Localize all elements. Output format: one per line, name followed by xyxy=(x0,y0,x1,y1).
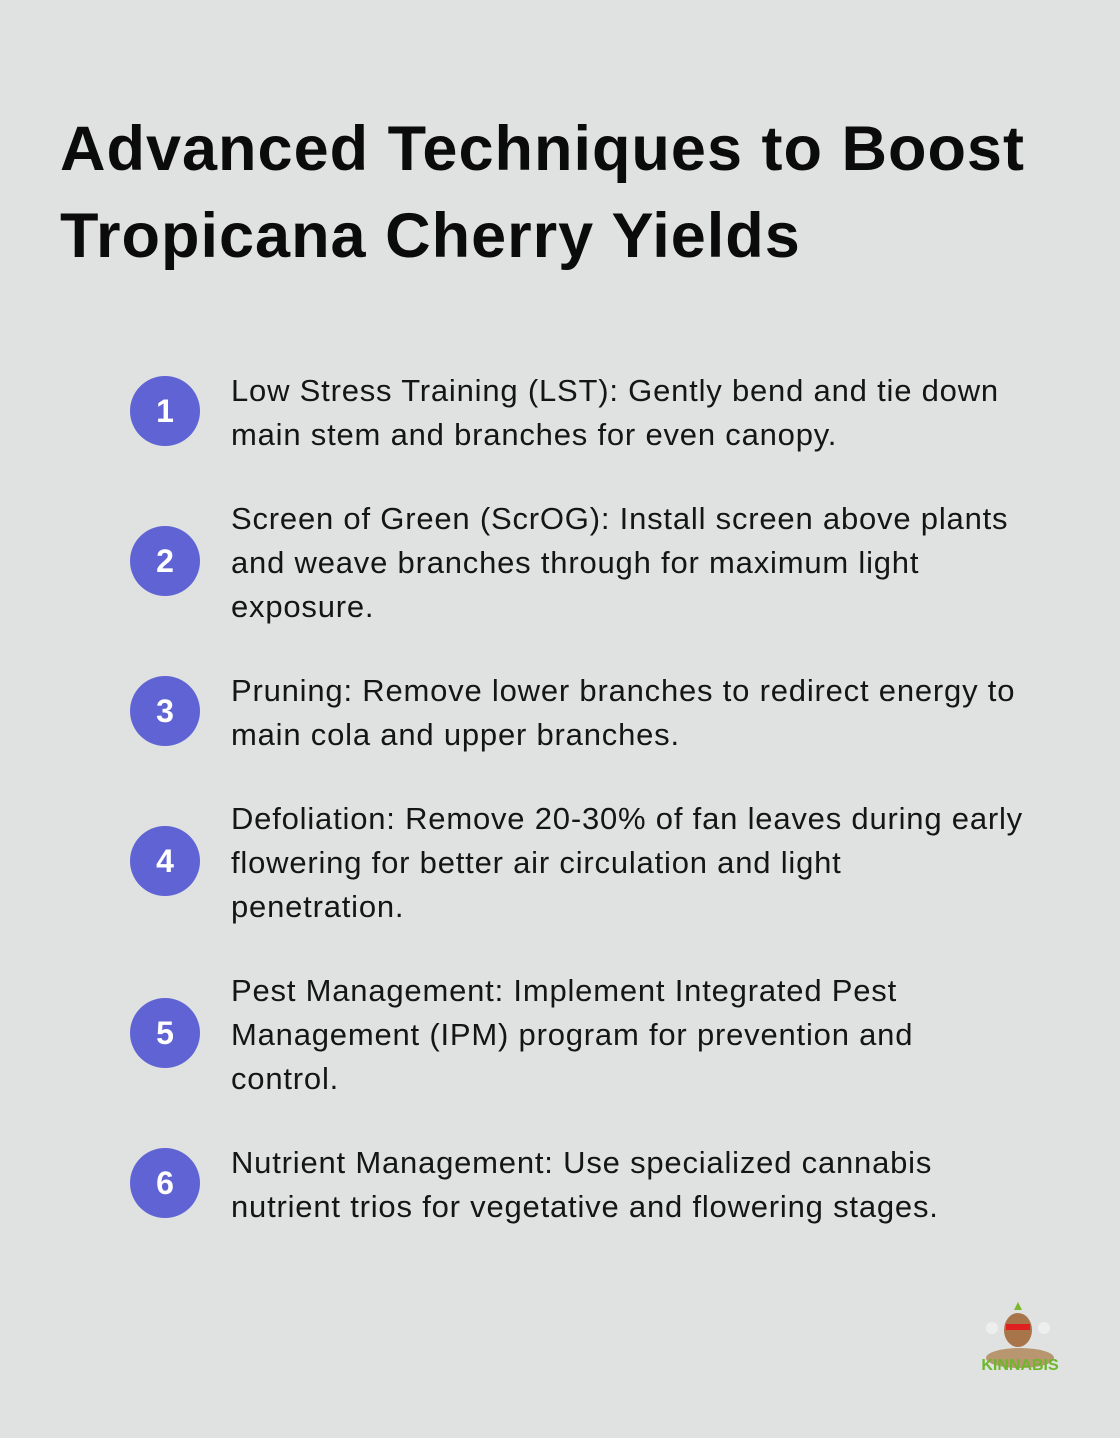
text 1 xyxy=(231,373,999,452)
text 5: control. xyxy=(231,1061,339,1096)
title xyxy=(60,114,1025,271)
badge 1: 1 xyxy=(156,393,174,429)
text 2: and weave branches through for maximum light xyxy=(231,545,919,580)
text 1: main stem and branches for even canopy. xyxy=(231,417,837,452)
logo: KINNABIS xyxy=(981,1357,1059,1374)
text 2: Screen of Green (ScrOG): Install screen above plants xyxy=(231,501,1008,536)
text 6: Nutrient Management: Use specialized cannabis xyxy=(231,1145,932,1180)
text 5 xyxy=(231,973,913,1096)
title: Advanced Techniques to Boost xyxy=(60,114,1025,184)
text 2: exposure. xyxy=(231,589,374,624)
text 4: Defoliation: Remove 20-30% of fan leaves during early xyxy=(231,801,1023,836)
badge 6 xyxy=(130,1148,200,1218)
badge 5: 5 xyxy=(156,1015,174,1051)
text 5: Management (IPM) program for prevention and xyxy=(231,1017,913,1052)
text 4 xyxy=(231,801,1023,924)
item 2 xyxy=(130,501,1008,624)
text 3: main cola and upper branches. xyxy=(231,717,680,752)
item 3 xyxy=(130,673,1015,752)
text 4: penetration. xyxy=(231,889,404,924)
item 5 xyxy=(130,973,913,1096)
badge 5 xyxy=(130,998,200,1068)
text 6: nutrient trios for vegetative and flowering stages. xyxy=(231,1189,939,1224)
badge 4 xyxy=(130,826,200,896)
text 5: Pest Management: Implement Integrated Pest xyxy=(231,973,897,1008)
text 3 xyxy=(231,673,1015,752)
badge 3 xyxy=(130,676,200,746)
badge 2: 2 xyxy=(156,543,174,579)
badge 3: 3 xyxy=(156,693,174,729)
text 2 xyxy=(231,501,1008,624)
text 6 xyxy=(231,1145,939,1224)
item 4 xyxy=(130,801,1023,924)
text 1: Low Stress Training (LST): Gently bend and tie down xyxy=(231,373,999,408)
item 1 xyxy=(130,373,999,452)
text 4: flowering for better air circulation and light xyxy=(231,845,842,880)
badge 6: 6 xyxy=(156,1165,174,1201)
badge 1 xyxy=(130,376,200,446)
title: Tropicana Cherry Yields xyxy=(60,201,801,271)
text 3: Pruning: Remove lower branches to redirect energy to xyxy=(231,673,1015,708)
badge 2 xyxy=(130,526,200,596)
logo xyxy=(981,1302,1059,1374)
badge 4: 4 xyxy=(156,843,174,879)
item 6 xyxy=(130,1145,939,1224)
